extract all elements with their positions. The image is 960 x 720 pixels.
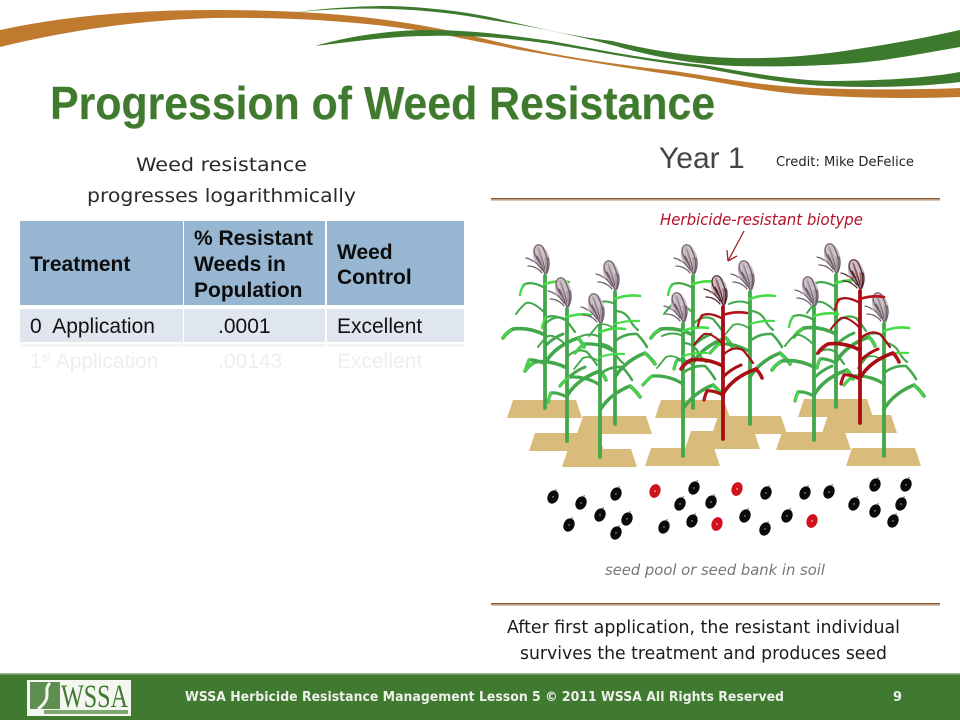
green plants	[503, 244, 924, 457]
table header row: Treatment	[30, 253, 130, 276]
title: Progression of Weed Resistance	[50, 78, 716, 130]
table header row: Weed	[337, 241, 393, 264]
table row: 0 application	[20, 309, 464, 342]
table row: 0 application: 0 Application	[30, 315, 155, 338]
table header row: Control	[337, 266, 412, 289]
subtitle: weed resistance progresses logarithmically: progresses logarithmically	[87, 185, 356, 207]
red resistant plants	[681, 260, 899, 439]
subtitle: weed resistance progresses logarithmically	[87, 154, 356, 207]
table row: faded 1st application: .00143	[218, 350, 282, 373]
table header row	[20, 221, 464, 305]
table row: faded 1st application	[20, 344, 464, 373]
arrow: to resistant plant	[727, 231, 744, 261]
table row: faded 1st application: Excellent	[337, 350, 422, 373]
soil tiles	[507, 399, 921, 467]
table row: 0 application: Excellent	[337, 315, 422, 338]
table row: faded 1st application: st	[42, 350, 52, 364]
year label: Year 1	[659, 142, 745, 175]
table header row: % Resistant	[194, 227, 313, 250]
table header row: Weeds in	[194, 253, 286, 276]
caption	[507, 617, 900, 664]
table row: 0 application: .0001	[218, 315, 271, 338]
credit: Credit: Mike DeFelice	[776, 155, 914, 170]
caption: survives the treatment and produces seed	[520, 643, 887, 664]
footer bar	[0, 673, 960, 720]
logo: WSSA	[27, 679, 131, 716]
caption: After first application, the resistant individual	[507, 617, 900, 638]
table row: faded 1st application: 1	[30, 350, 42, 373]
subtitle: weed resistance progresses logarithmically: Weed resistance	[136, 154, 307, 176]
footer text: WSSA Herbicide Resistance Management Lesson 5 © 2011 WSSA All Rights Reserved	[185, 690, 784, 705]
table header row: Population	[194, 279, 302, 302]
title: Progression of Weed Resistance	[50, 77, 715, 129]
table row: faded 1st application: Application	[51, 350, 158, 373]
swoosh: orange	[0, 10, 960, 98]
logo: WSSA: WSSA	[61, 679, 128, 715]
seed bank	[545, 476, 914, 542]
table: resistance progression	[20, 221, 464, 373]
swoosh: lower green	[315, 30, 960, 87]
illustration: corn plants on soil tiles	[503, 244, 924, 467]
page number: 9	[893, 690, 902, 705]
swoosh: upper green	[297, 6, 960, 66]
label: herbicide-resistant biotype: Herbicide-resistant biotype	[660, 210, 863, 229]
label: seed pool: seed pool or seed bank in soil	[605, 561, 826, 579]
